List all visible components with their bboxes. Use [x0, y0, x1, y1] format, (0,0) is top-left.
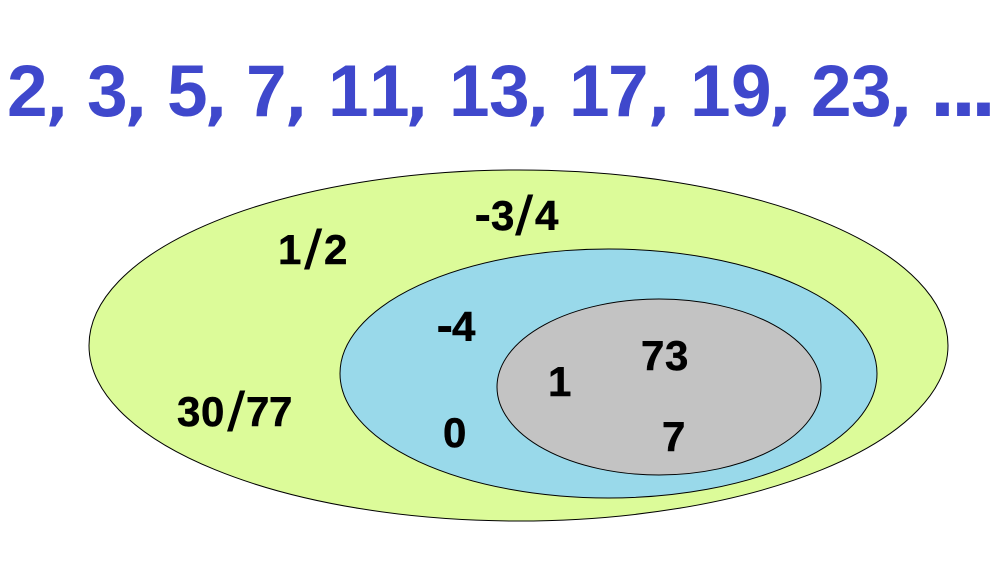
title: number sequence: ... — [930, 36, 996, 136]
title: number sequence: , — [527, 63, 550, 133]
title: number sequence: , — [125, 63, 148, 133]
inner ellipse: natural numbers — [497, 299, 821, 475]
label: 73: 73 — [641, 332, 688, 379]
label: -3/4: / — [515, 185, 534, 243]
title: number sequence: 11 — [328, 51, 410, 132]
title: number sequence: , — [648, 63, 671, 133]
title: number sequence: , — [769, 63, 792, 133]
title: number sequence: , — [46, 63, 69, 133]
title: number sequence: 7 — [246, 51, 287, 132]
label: -3/4: 4 — [535, 192, 559, 239]
label: 30/77: / — [227, 381, 246, 439]
title: number sequence: 5 — [167, 51, 208, 132]
title: number sequence: 13 — [449, 51, 530, 132]
title: number sequence: 2 — [7, 51, 48, 132]
label: 1/2: 2 — [324, 226, 347, 273]
title: number sequence: 19 — [690, 51, 772, 132]
label: -4: - — [436, 302, 453, 351]
title: number sequence: 23 — [811, 51, 892, 132]
label: -3/4: - — [474, 191, 491, 240]
title: number sequence: , — [406, 63, 429, 133]
title: number sequence: , — [285, 63, 308, 133]
label: -4: 4 — [452, 303, 476, 350]
label: 1: 1 — [548, 358, 571, 405]
title: number sequence: 3 — [87, 51, 128, 132]
label: -3/4: 3 — [491, 192, 514, 239]
label: 7: 7 — [662, 413, 685, 460]
label: 1/2: / — [304, 219, 323, 277]
title: number sequence: 17 — [569, 51, 649, 132]
title: number sequence: , — [205, 63, 228, 133]
label: 30/77: 30 — [177, 388, 224, 435]
middle ellipse: integers — [340, 249, 877, 498]
label: 30/77: 77 — [246, 388, 292, 435]
outer ellipse: rational numbers — [89, 170, 948, 521]
title: number sequence: , — [890, 63, 913, 133]
label: 1/2: 1 — [278, 226, 301, 273]
label: 0: 0 — [443, 409, 466, 456]
